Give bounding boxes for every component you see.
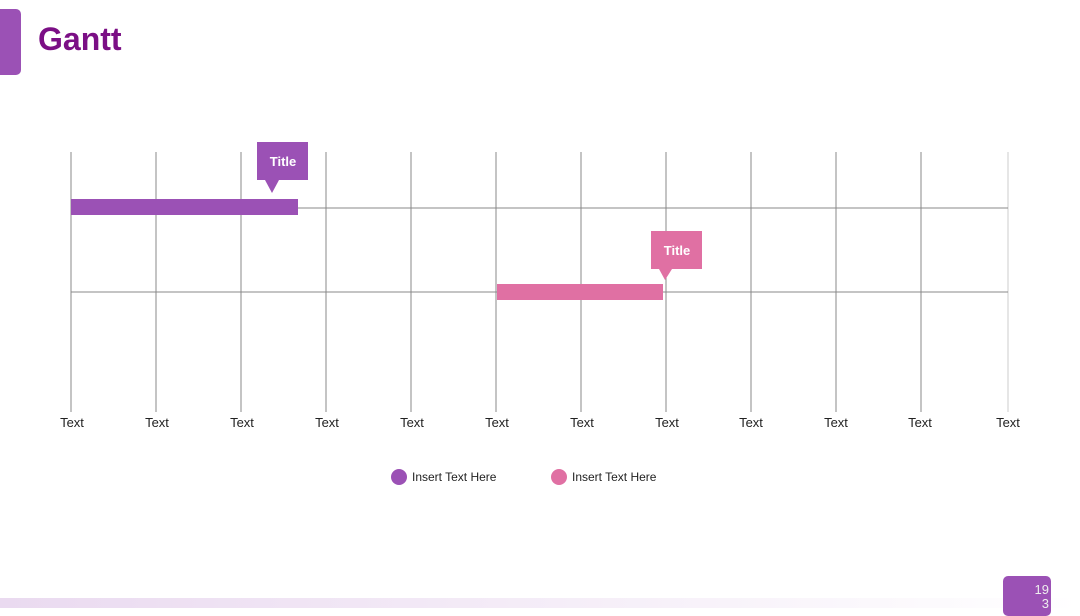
axis labels: Text: [145, 415, 169, 430]
axis labels: Text: [739, 415, 763, 430]
page number: 3: [1042, 596, 1049, 611]
legend: Insert Text Here: [412, 470, 497, 484]
title: Gantt: [38, 21, 122, 57]
axis labels: Text: [485, 415, 509, 430]
bar: task 1: [71, 199, 298, 215]
page number: 19: [1035, 582, 1049, 597]
legend: [391, 469, 657, 485]
axis labels: Text: [908, 415, 932, 430]
axis labels: Text: [996, 415, 1020, 430]
page number: [1003, 576, 1051, 616]
callout: task 1 title: Title: [270, 154, 296, 169]
callout: task 1 title: [257, 142, 308, 193]
bar: task 2: [497, 284, 663, 300]
axis labels: Text: [400, 415, 424, 430]
callout: task 2 title: Title: [664, 243, 690, 258]
accent tab: [0, 9, 21, 75]
legend: Insert Text Here: [572, 470, 657, 484]
axis labels: Text: [230, 415, 254, 430]
axis labels: Text: [824, 415, 848, 430]
axis labels: Text: [570, 415, 594, 430]
axis labels: Text: [60, 415, 84, 430]
axis labels: [60, 415, 1020, 430]
axis labels: Text: [655, 415, 679, 430]
callout: task 2 title: [651, 231, 702, 280]
axis labels: Text: [315, 415, 339, 430]
